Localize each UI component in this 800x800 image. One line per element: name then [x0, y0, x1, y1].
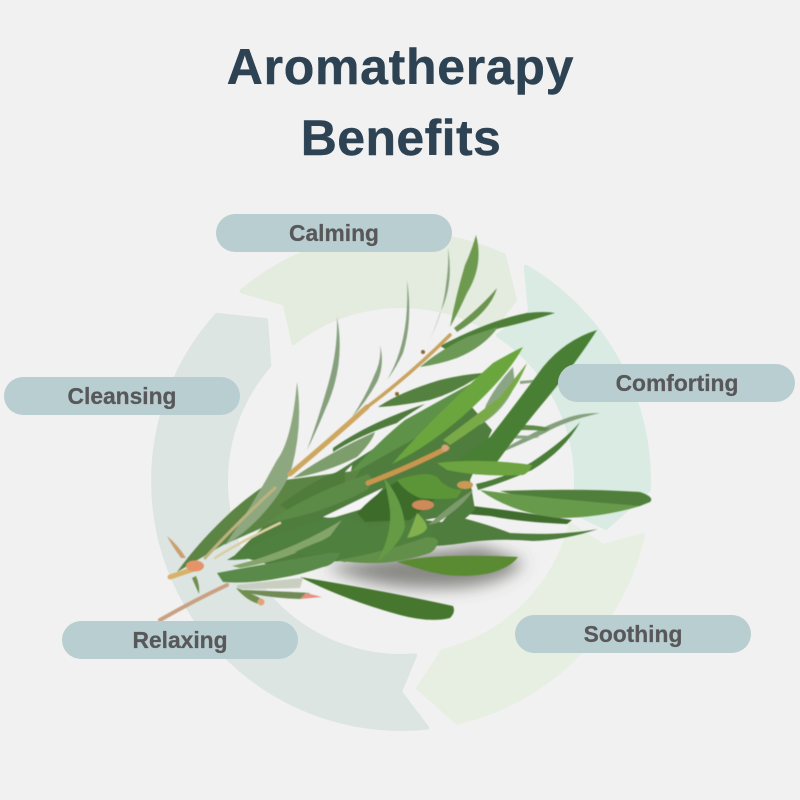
title: Benefits [301, 110, 501, 166]
arrow: soothing segment [418, 525, 643, 723]
label: relaxing [62, 621, 298, 659]
leaf shadow [325, 546, 524, 588]
label: soothing [515, 615, 751, 653]
label pills [4, 214, 795, 659]
background gaps between leaves [310, 465, 447, 522]
centre dark leaf and cluster [357, 474, 462, 522]
label: calming: Calming [289, 220, 379, 246]
title [227, 39, 574, 166]
label: relaxing: Relaxing [132, 627, 228, 653]
label: cleansing: Cleansing [68, 383, 176, 409]
tea tree branch illustration [160, 235, 651, 620]
stems [160, 335, 450, 620]
leaves and stems [160, 235, 651, 620]
arrow: relaxing and cleansing segment [153, 315, 427, 729]
cycle ring of arrows [153, 233, 649, 729]
label: comforting [558, 364, 795, 402]
front leaves [377, 461, 532, 562]
thin dark right twigs [500, 378, 558, 439]
label: calming [216, 214, 452, 252]
fine grey-green leaves [307, 248, 600, 460]
arrow: comforting segment [498, 267, 649, 528]
orange branch nodes and tips [186, 350, 473, 606]
upper back leaves [333, 235, 597, 490]
label: comforting: Comforting [616, 370, 738, 396]
title: Aromatherapy [227, 39, 574, 95]
label: cleansing [4, 377, 240, 415]
label: soothing: Soothing [584, 621, 682, 647]
dense left leaf cluster [167, 382, 438, 604]
lower back leaves [300, 490, 651, 620]
dark underlying foliage mass [235, 405, 492, 565]
arrow: calming segment [242, 233, 515, 343]
